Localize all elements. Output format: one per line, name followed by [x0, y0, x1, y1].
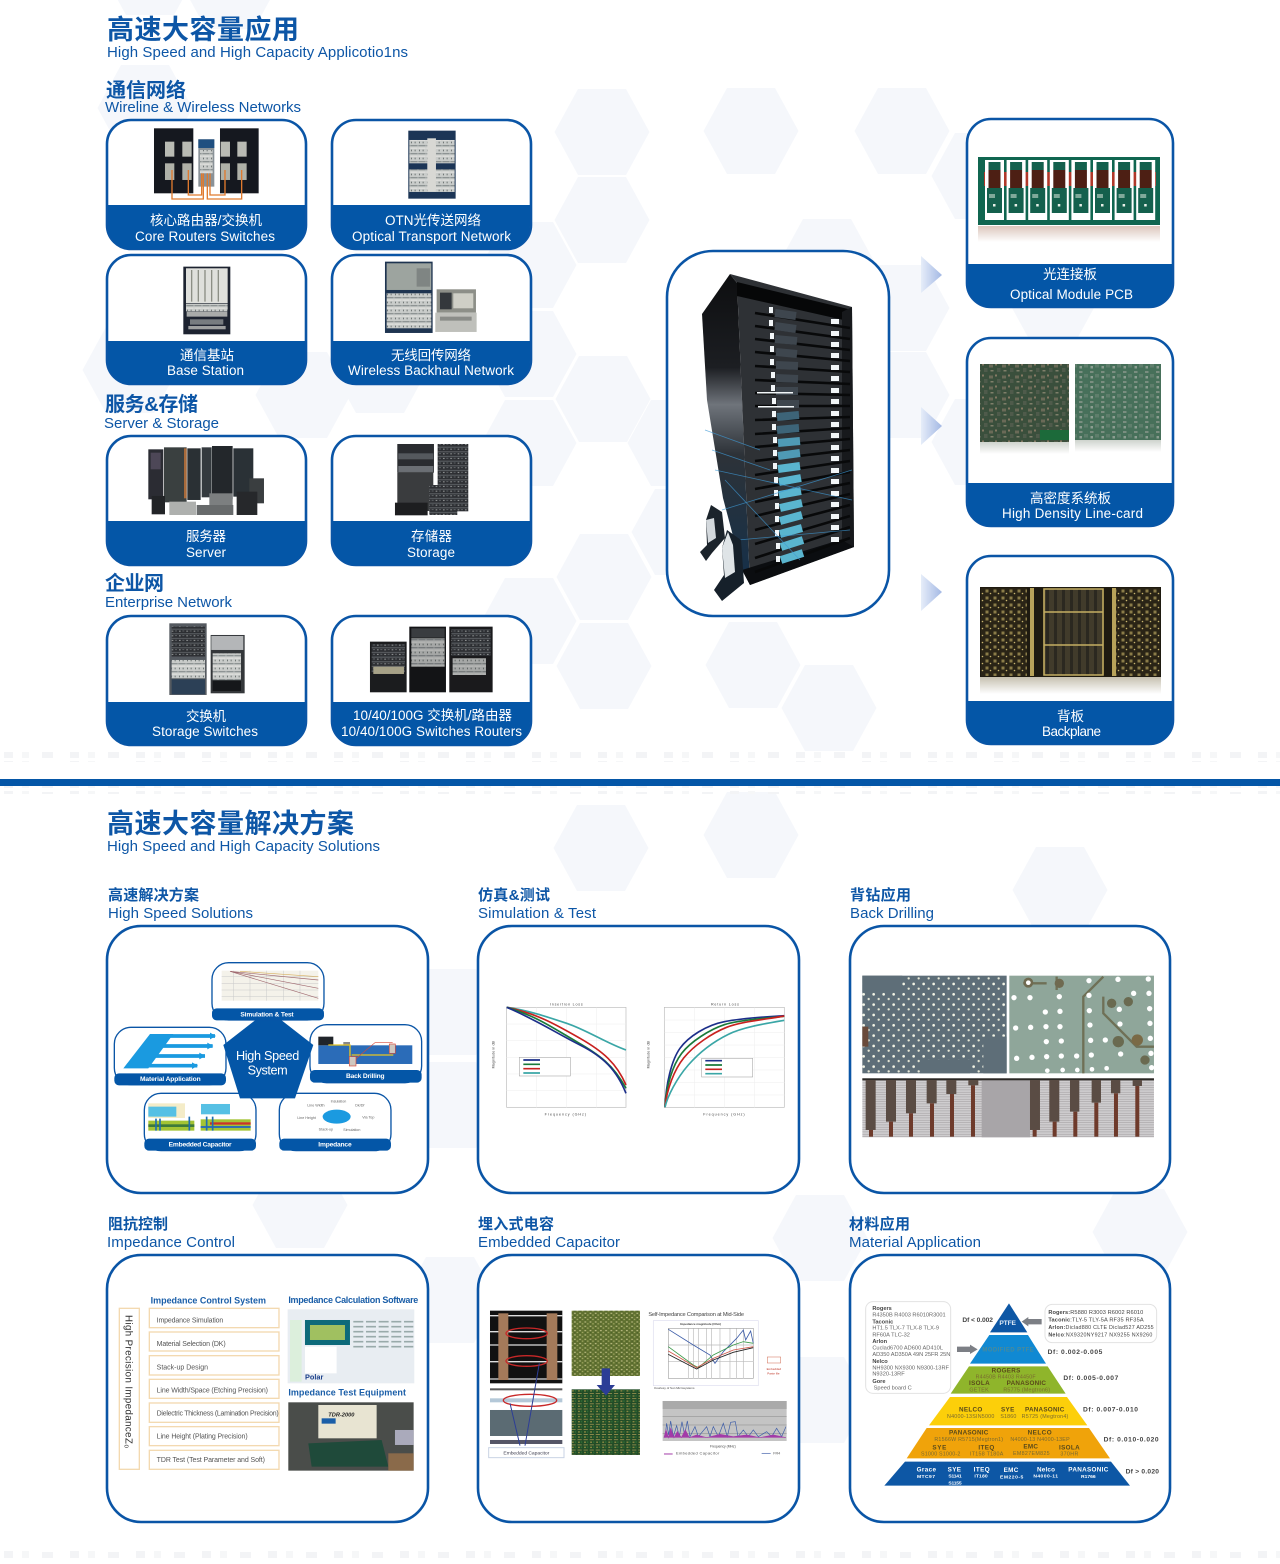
sub-card: back drilling: Back Drilling	[346, 1073, 385, 1080]
list: impedance control system: Material Selection (DK)	[157, 1341, 226, 1348]
pyramid tier: grace sye iteq emc nelco panasonic: S1155	[948, 1480, 962, 1486]
photo: capacitor cross-section bottom	[490, 1363, 562, 1446]
feet	[700, 505, 744, 601]
chart: return loss: Return Loss	[711, 1002, 739, 1006]
label: storage switches: 交换机	[186, 708, 226, 724]
label: OTN	[352, 213, 511, 244]
pyramid tier: rogers isola panasonic: ISOLA	[969, 1380, 990, 1387]
title: applications: High Speed and High Capacity Applicotio1ns	[107, 44, 408, 61]
callout: PTFE vendors: Rogers:R5880 R3003 R6002 R6010	[1048, 1310, 1143, 1316]
arrow: to optical module	[921, 256, 942, 293]
callout: modified PTFE vendors: N9320-13RF	[872, 1372, 905, 1378]
label: embedded capacitor: Embedded Capacitor	[503, 1450, 550, 1456]
heading: enterprise network: Enterprise Network	[105, 594, 232, 611]
vertical label: high precision impedance: High Precision ImpedanceZ₀	[122, 1315, 133, 1448]
pyramid tier: nelco sye panasonic	[929, 1397, 1087, 1425]
panel: impedance control	[107, 1255, 428, 1522]
photo: capacitor cross-section top	[490, 1311, 562, 1383]
labels: dissipation factor ranges: Df: 0.002-0.005	[1048, 1349, 1103, 1356]
label: server: 服务器	[186, 529, 226, 544]
list: impedance control system: Dielectric Thickness (Lamination Precision)	[157, 1410, 279, 1417]
sub-card: impedance: Line Width	[307, 1104, 325, 1108]
label: backplane	[1042, 709, 1101, 739]
pyramid tier: panasonic nelco sye iteq emc isola: IT158 T180A	[970, 1452, 1004, 1458]
pyramid tier: rogers isola panasonic: ROGERS	[992, 1368, 1020, 1375]
pyramid tier: nelco sye panasonic: N4000-13SIN5000	[947, 1414, 994, 1420]
background hexagon pattern	[82, 0, 1188, 1443]
chart: EMI spectrum: FR4	[773, 1451, 780, 1455]
heading: material application	[849, 1215, 981, 1251]
shelves	[755, 313, 850, 572]
screenshot: impedance calculation software: Polar	[305, 1372, 323, 1381]
heading: high speed solutions: High Speed Solutions	[108, 905, 253, 922]
panel: high speed system diagram	[107, 926, 428, 1193]
callout: PTFE vendors: Arlon:Diclad880 CLTE Diclad527 AD255	[1048, 1325, 1154, 1331]
arrow: to backplane	[921, 574, 942, 611]
wiring overlay	[705, 430, 852, 560]
callout: PTFE vendors: Taconic:TLY-5 TLY-5A RF35 RF35A	[1048, 1318, 1144, 1324]
pyramid tier: panasonic nelco sye iteq emc isola: EM827EM825	[1013, 1451, 1050, 1457]
label: core routers: 核心路由器/交换机	[150, 212, 262, 228]
image: OTN chassis	[408, 131, 456, 199]
pyramid tier: panasonic nelco sye iteq emc isola: EMC	[1023, 1444, 1038, 1451]
list: impedance control system: Line Height (Plating Precision)	[157, 1434, 248, 1441]
heading: server and storage: 服务&存储	[105, 393, 198, 416]
chart: self-impedance comparison: Courtesy of Sun Microsystems	[654, 1386, 695, 1390]
blade panels	[775, 313, 803, 560]
list: impedance control system	[149, 1295, 279, 1469]
image: server rack	[700, 274, 854, 601]
heading: high speed solutions	[108, 886, 253, 922]
label: 10/40/100G: 10/40/100G Switches Routers	[341, 724, 522, 739]
label: storage switches	[152, 708, 258, 739]
label: embedded capacitor	[489, 1448, 564, 1458]
label: 10/40/100G: 10/40/100G 交换机/路由器	[353, 707, 512, 723]
labels: dissipation factor ranges	[962, 1317, 1159, 1476]
pyramid tier: nelco sye panasonic: NELCO	[959, 1406, 982, 1413]
label: storage	[407, 529, 455, 560]
photo: impedance test equipment: Impedance Test Equipment	[288, 1388, 406, 1398]
pyramid tier: panasonic nelco sye iteq emc isola: S1000 S1000-2	[921, 1452, 960, 1458]
chart: self-impedance comparison	[648, 1312, 781, 1390]
image: optical module board	[978, 157, 1160, 242]
pyramid tier: grace sye iteq emc nelco panasonic: S1141	[948, 1474, 962, 1480]
pyramid tier: grace sye iteq emc nelco panasonic: EMC	[1004, 1467, 1019, 1474]
centre pentagon: high speed system	[223, 1010, 313, 1098]
title: solutions: High Speed and High Capacity Solutions	[107, 838, 380, 855]
screenshot: impedance calculation software	[288, 1295, 418, 1383]
pyramid tier: grace sye iteq emc nelco panasonic: N4000-11	[1033, 1474, 1058, 1480]
label: base station: Base Station	[167, 363, 244, 378]
pyramid tier: modified PTFE	[970, 1335, 1046, 1364]
callout: modified PTFE vendors: Gore	[872, 1379, 886, 1385]
label: backhaul: Wireless Backhaul Network	[348, 363, 514, 378]
card: 10/40/100G switches routers	[332, 616, 531, 745]
pyramid tier: PTFE	[990, 1303, 1027, 1332]
heading: back drilling	[850, 886, 934, 922]
panel: simulation charts	[478, 926, 799, 1193]
labels: dissipation factor ranges: Df: 0.005-0.007	[1063, 1375, 1119, 1382]
pyramid tier: nelco sye panasonic: S1860	[1000, 1414, 1016, 1420]
image: line-card boards	[980, 364, 1161, 454]
pyramid tier: nelco sye panasonic: R5725 (Megtron4)	[1022, 1414, 1069, 1420]
list: impedance control system: Impedance Control System	[151, 1295, 266, 1305]
sub-card: impedance: Insulation	[331, 1100, 346, 1104]
callout: modified PTFE vendors: HT1.5 TLX-7 TLX-8 TLX-9	[872, 1326, 939, 1332]
callout: modified PTFE vendors	[866, 1302, 951, 1393]
callout: modified PTFE vendors: Speed board C	[874, 1386, 912, 1392]
photo: drilled holes, close-up	[1009, 976, 1154, 1073]
heading: high speed solutions: 高速解决方案	[108, 886, 199, 904]
vertical label: high precision impedance	[119, 1308, 139, 1469]
chart: EMI spectrum: Frequency (MHz)	[710, 1444, 736, 1448]
pyramid tier: panasonic nelco sye iteq emc isola: ISOLA	[1059, 1444, 1080, 1451]
divider band	[0, 779, 1280, 786]
card: base station	[107, 255, 306, 384]
pyramid tier: grace sye iteq emc nelco panasonic: PANASONIC	[1068, 1466, 1109, 1473]
chart: self-impedance comparison: Embedded	[767, 1367, 781, 1371]
label: core routers	[135, 212, 275, 244]
chart: self-impedance comparison: Paste file	[767, 1371, 780, 1375]
photo: PCB before	[572, 1311, 640, 1376]
labels: dissipation factor ranges: Df: 0.007-0.010	[1083, 1407, 1138, 1414]
callout: modified PTFE vendors: NH9300 NX9300 N9300-13RF	[872, 1365, 950, 1371]
callout: PTFE vendors	[1045, 1304, 1157, 1343]
image: core routers	[154, 128, 259, 199]
pyramid tier: panasonic nelco sye iteq emc isola: PANASONIC	[949, 1430, 989, 1437]
pyramid tier: rogers isola panasonic: R5775 (Megtron6)	[1003, 1388, 1050, 1394]
labels: dissipation factor ranges: Df: 0.010-0.020	[1104, 1436, 1159, 1443]
label: storage: 存储器	[411, 529, 452, 544]
pyramid tier: PTFE: PTFE	[999, 1320, 1017, 1327]
list: impedance control system: TDR Test (Test Parameter and Soft)	[157, 1457, 265, 1464]
chart: EMI spectrum	[663, 1401, 787, 1455]
pyramid tier: panasonic nelco sye iteq emc isola: N4000-13 N4000-13EP	[1010, 1437, 1070, 1443]
sub-card: impedance: Simulation	[343, 1128, 360, 1132]
indicator lights	[757, 307, 839, 562]
sub-card: impedance: Dk/Df	[355, 1104, 365, 1108]
chart: return loss: Magnitude in dB	[646, 1040, 650, 1068]
panel: embedded capacitor	[478, 1255, 799, 1522]
photo: impedance test equipment	[288, 1388, 414, 1471]
image: backhaul equipment	[385, 262, 477, 333]
label: storage switches: Storage Switches	[152, 724, 258, 739]
label: OTN: Optical Transport Network	[352, 229, 511, 244]
sub-card: impedance	[279, 1093, 391, 1151]
card: server	[107, 436, 306, 565]
image: base station	[183, 267, 230, 334]
screenshot: impedance calculation software: Impedance Calculation Software	[288, 1295, 418, 1305]
pyramid tier: grace sye iteq emc nelco panasonic: MTC97	[917, 1474, 935, 1480]
heading: embedded capacitor: 埋入式电容	[478, 1215, 554, 1233]
pyramid tier: rogers isola panasonic: GETEK	[969, 1388, 989, 1394]
sub-card: impedance: Line Height	[297, 1116, 316, 1120]
heading: back drilling: Back Drilling	[850, 905, 934, 922]
image: backplane board	[980, 587, 1161, 694]
photo: PCB after	[572, 1389, 640, 1455]
label: core routers: Core Routers Switches	[135, 229, 275, 244]
label: server	[186, 529, 226, 560]
image: switches	[169, 623, 245, 695]
title: applications	[107, 15, 408, 61]
card: high density line-card	[967, 338, 1173, 526]
list: impedance control system: Line Width/Space (Etching Precision)	[157, 1388, 268, 1395]
pyramid tier: panasonic nelco sye iteq emc isola: R1566W R5715(Megtron1)	[934, 1437, 1003, 1443]
sub-card: impedance: Stack-up	[319, 1127, 333, 1131]
heading: server and storage: Server & Storage	[104, 415, 219, 432]
heading: wireline and wireless networks: Wireline & Wireless Networks	[105, 99, 301, 116]
heading: material application: Material Application	[849, 1234, 981, 1251]
image: storage	[395, 444, 468, 515]
pyramid tier: grace sye iteq emc nelco panasonic: ITEQ	[974, 1467, 990, 1474]
title: applications: 高速大容量应用	[107, 15, 299, 45]
centre pentagon: high speed system: System	[248, 1064, 288, 1078]
pyramid tier: panasonic nelco sye iteq emc isola: SYE	[932, 1444, 946, 1451]
label: backplane: Backplane	[1042, 724, 1101, 739]
chart: self-impedance comparison: Impedance magnitude (Ohm)	[680, 1322, 721, 1326]
arrow: PCB change	[597, 1368, 615, 1396]
callout: modified PTFE vendors: AD350 AD350A 49N 25FR 25N	[872, 1352, 950, 1358]
pyramid tier: nelco sye panasonic: SYE	[1001, 1406, 1014, 1413]
label: backhaul: 无线回传网络	[391, 348, 472, 363]
callout: modified PTFE vendors: Cuclad6700 AD600 AD410L	[872, 1345, 943, 1351]
pyramid tier: grace sye iteq emc nelco panasonic: EM220-5	[1000, 1474, 1024, 1480]
photo: back-drill cross-section	[862, 1078, 1154, 1137]
pyramid tier: grace sye iteq emc nelco panasonic: IT180	[974, 1474, 988, 1480]
label: storage: Storage	[407, 545, 455, 560]
callout: modified PTFE vendors: RF60A TLC-32	[872, 1332, 910, 1338]
heading: wireline and wireless networks	[105, 78, 301, 116]
pyramid tier: grace sye iteq emc nelco panasonic: R1766	[1081, 1474, 1096, 1480]
arrow: to line card	[921, 407, 942, 445]
chart: insertion loss: Frequency (GHz)	[545, 1113, 586, 1117]
pyramid tier: grace sye iteq emc nelco panasonic: Grace	[917, 1467, 936, 1474]
sub-card: material application: Material Application	[140, 1076, 201, 1083]
callout: modified PTFE vendors: Nelco	[872, 1359, 888, 1365]
heading: back drilling: 背钻应用	[850, 886, 911, 904]
heading: impedance control: 阻抗控制	[108, 1215, 168, 1233]
sub-card: embedded capacitor: Embedded Capacitor	[169, 1141, 232, 1148]
panel: server rack	[667, 251, 889, 616]
label: line-card	[1002, 490, 1143, 521]
faint print-through strips	[0, 752, 1280, 1559]
callout: modified PTFE vendors: Rogers	[872, 1306, 892, 1312]
arrows: vendor pointers	[957, 1317, 1042, 1354]
chart: return loss: Frequency (GHz)	[703, 1113, 745, 1117]
sub-card: back drilling	[310, 1025, 422, 1083]
heading: server and storage	[104, 393, 219, 432]
label: server: Server	[186, 545, 226, 560]
card: storage	[332, 436, 531, 565]
pyramid tier: panasonic nelco sye iteq emc isola: ITEQ	[978, 1444, 994, 1451]
sub-card: material application	[114, 1027, 226, 1085]
heading: simulation and test: Simulation & Test	[478, 905, 597, 922]
label: backplane: 背板	[1057, 709, 1084, 724]
card: wireless backhaul network	[332, 255, 531, 384]
sub-card: embedded capacitor	[144, 1093, 256, 1151]
card: storage switches	[107, 616, 306, 745]
label: 10/40/100G	[341, 707, 522, 739]
sub-card: impedance: Via Top	[362, 1116, 374, 1120]
pyramid tier: panasonic nelco sye iteq emc isola: NELCO	[1028, 1430, 1052, 1437]
pyramid tier: rogers isola panasonic: R4450B R4403 R4450F	[976, 1375, 1036, 1381]
image: servers	[148, 446, 264, 515]
label: backhaul	[348, 348, 514, 378]
pyramid tier: grace sye iteq emc nelco panasonic: SYE	[948, 1467, 961, 1474]
title: solutions	[107, 808, 380, 855]
heading: impedance control: Impedance Control	[107, 1234, 235, 1251]
pyramid tier: rogers isola panasonic	[951, 1366, 1066, 1394]
panel: material pyramid	[850, 1255, 1170, 1522]
card: optical transport network	[332, 120, 531, 249]
callout: modified PTFE vendors: Arlon	[872, 1339, 888, 1345]
pyramid tier: grace sye iteq emc nelco panasonic	[884, 1462, 1130, 1486]
label: line-card: 高密度系统板	[1030, 490, 1112, 506]
label: optical module PCB	[1010, 266, 1133, 302]
card: core routers switches	[107, 120, 306, 249]
pyramid tier: modified PTFE: MODIFIED PTFE	[982, 1348, 1034, 1354]
sub-card: impedance: Impedance	[318, 1141, 352, 1148]
centre pentagon: high speed system: High Speed	[236, 1049, 299, 1063]
card: backplane	[967, 556, 1173, 744]
sub-card: simulation and test	[212, 963, 324, 1020]
heading: simulation and test	[478, 886, 597, 922]
callout: PTFE vendors: Nelco:NX9320NY9217 NX9255 NX9260	[1048, 1332, 1152, 1338]
panel: back drilling photos	[850, 926, 1170, 1193]
photo: impedance test equipment: TDR-2000	[328, 1413, 355, 1419]
heading: impedance control	[107, 1215, 235, 1251]
chart: return loss	[646, 1002, 784, 1117]
image: chassis switches	[370, 627, 493, 692]
label: optical module PCB: Optical Module PCB	[1010, 287, 1133, 302]
label: OTN: OTN光传送网络	[385, 213, 482, 228]
label: line-card: High Density Line-card	[1002, 506, 1143, 521]
chart: insertion loss	[492, 1002, 626, 1117]
pyramid tier: panasonic nelco sye iteq emc isola: 370HR	[1060, 1452, 1078, 1458]
callout: modified PTFE vendors: R4350B R4003 R6010R3001	[872, 1313, 946, 1319]
sub-card: simulation and test: Simulation & Test	[240, 1011, 294, 1018]
list: impedance control system: Stack-up Design	[157, 1364, 208, 1371]
pyramid tier: grace sye iteq emc nelco panasonic: Nelco	[1037, 1467, 1055, 1474]
label: optical module PCB: 光连接板	[1043, 266, 1098, 282]
labels: dissipation factor ranges: Df > 0.020	[1126, 1469, 1159, 1476]
heading: material application: 材料应用	[849, 1215, 910, 1233]
heading: enterprise network: 企业网	[105, 571, 164, 595]
callout: modified PTFE vendors: Taconic	[872, 1319, 893, 1325]
heading: embedded capacitor	[478, 1215, 620, 1251]
heading: simulation and test: 仿真&测试	[478, 886, 550, 904]
pyramid tier: panasonic nelco sye iteq emc isola	[907, 1428, 1110, 1458]
photo: drilled holes, board	[862, 976, 1007, 1073]
chart: insertion loss: Magnitude in dB	[492, 1040, 496, 1068]
card: optical module PCB	[967, 119, 1173, 307]
pyramid tier: rogers isola panasonic: PANASONIC	[1007, 1380, 1046, 1387]
right frame	[842, 307, 854, 547]
heading: wireline and wireless networks: 通信网络	[106, 78, 186, 102]
heading: embedded capacitor: Embedded Capacitor	[478, 1234, 620, 1251]
chart: self-impedance comparison: Self-Impedance Comparison at Mid-Side	[648, 1312, 744, 1318]
list: impedance control system: Impedance Simulation	[157, 1317, 223, 1324]
chart: insertion loss: Insertion Loss	[550, 1002, 583, 1006]
heading: enterprise network	[105, 571, 232, 611]
label: base station	[167, 347, 244, 378]
label: base station: 通信基站	[180, 347, 234, 363]
title: solutions: 高速大容量解决方案	[107, 808, 354, 839]
pyramid tier: nelco sye panasonic: PANASONIC	[1025, 1406, 1065, 1413]
labels: dissipation factor ranges: Df < 0.002	[962, 1317, 993, 1324]
chart: EMI spectrum: Embedded Capacitor	[676, 1450, 720, 1455]
